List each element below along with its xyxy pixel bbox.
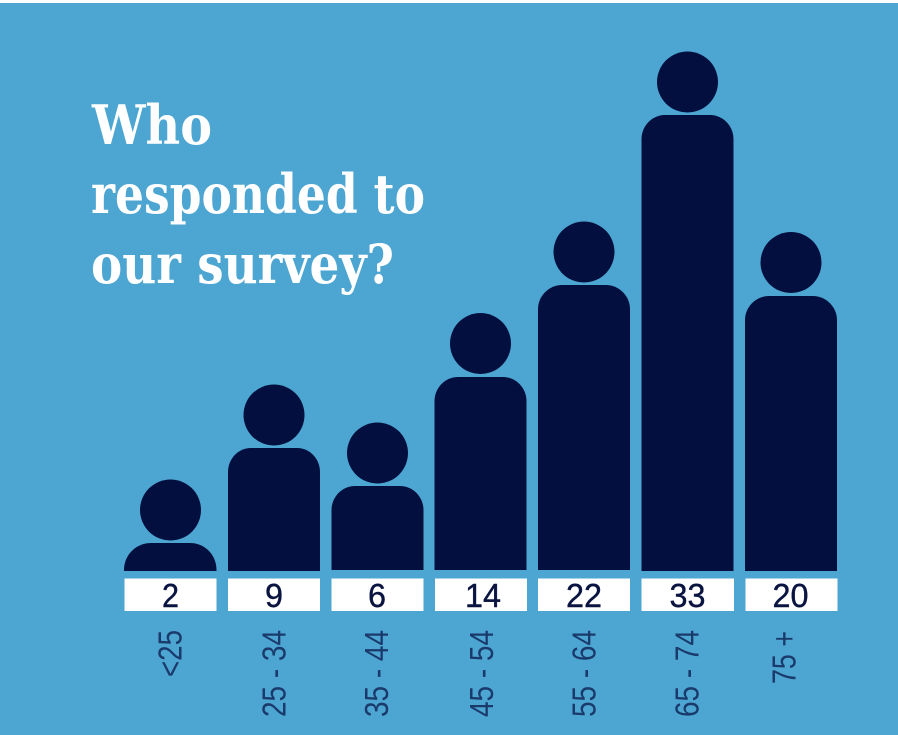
value: 22: 22 — [566, 577, 602, 614]
value: 2: 2 — [162, 577, 179, 614]
age labels — [152, 630, 802, 717]
value labels — [124, 577, 838, 614]
age: 25-34: 25 - 34 — [256, 630, 292, 717]
value: 14 — [435, 577, 527, 614]
value: 6 — [332, 577, 424, 614]
person: under 25 — [124, 480, 216, 571]
person: 75+ — [745, 232, 837, 571]
title — [91, 93, 425, 296]
value: 33: 33 — [670, 577, 706, 614]
value: 20 — [746, 577, 838, 614]
age: 35-44: 35 - 44 — [358, 630, 395, 717]
value: 14: 14 — [465, 577, 501, 614]
value: 20: 20 — [772, 577, 808, 614]
person: 25-34 — [228, 384, 320, 571]
person: 65-74 — [642, 52, 734, 571]
person chart — [124, 52, 837, 571]
value: 33 — [642, 577, 734, 614]
age: 55-64: 55 - 64 — [566, 630, 602, 717]
age: 65-74: 65 - 74 — [668, 630, 706, 717]
value: 22 — [538, 577, 630, 614]
value: 9: 9 — [265, 577, 283, 614]
age: under 25: <25 — [152, 630, 188, 677]
person: 35-44 — [332, 422, 424, 570]
value: 2 — [124, 577, 216, 614]
title: our survey? — [91, 232, 394, 296]
title: Who — [91, 93, 212, 157]
age: 45-54: 45 - 54 — [463, 630, 500, 717]
value: 6: 6 — [368, 577, 386, 614]
title: responded to — [91, 162, 425, 226]
person: 55-64 — [538, 222, 630, 570]
value: 9 — [228, 577, 320, 614]
person: 45-54 — [434, 313, 526, 570]
age: 75+: 75 + — [766, 631, 802, 684]
